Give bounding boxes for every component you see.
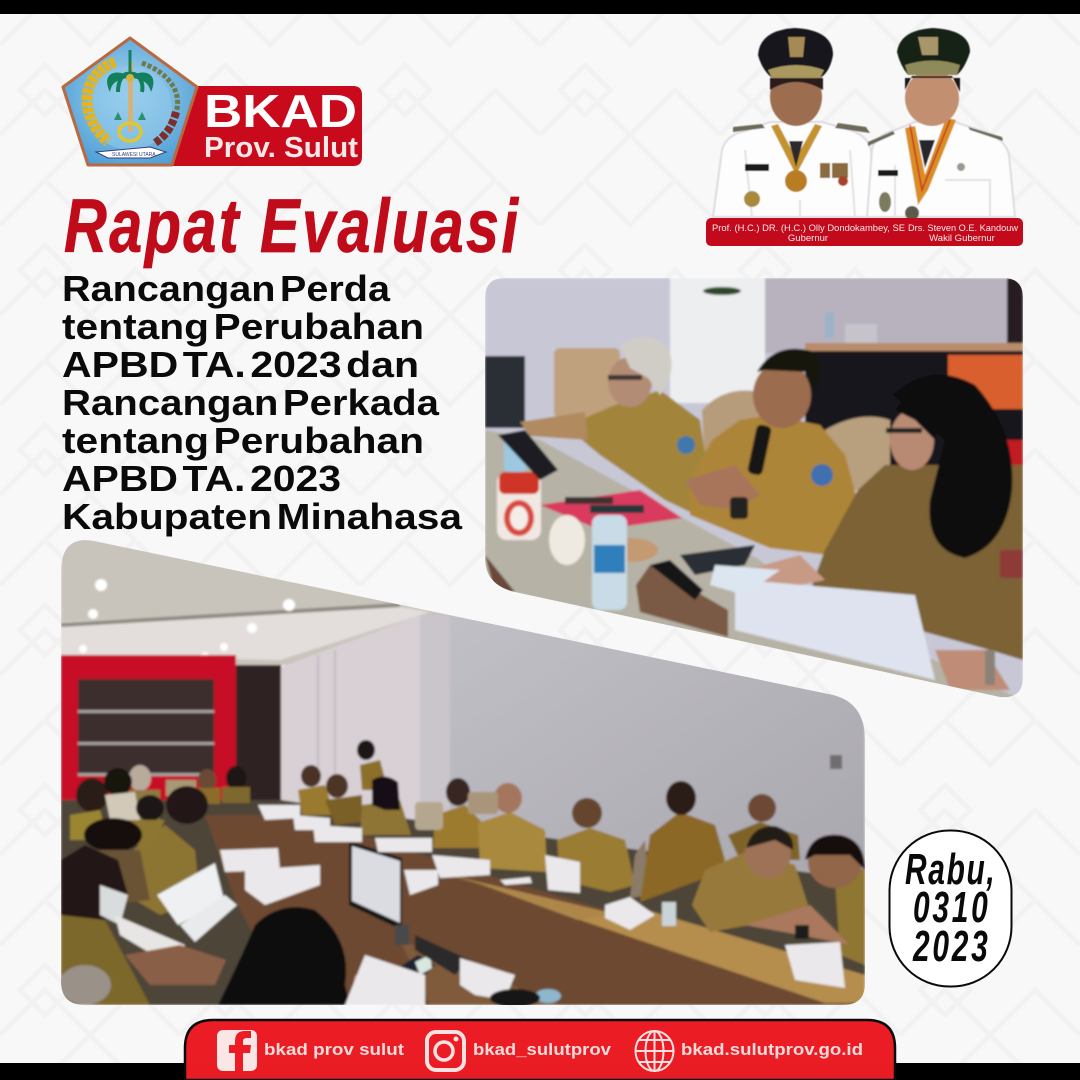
- table items: folder, phones, jar, glass, bottle, bag: [497, 430, 935, 680]
- footer bar: [185, 1020, 895, 1080]
- subtitle text block: Kabupaten Minahasa: [62, 496, 463, 537]
- icon: facebook: [217, 1030, 257, 1071]
- icon: instagram: [427, 1032, 464, 1070]
- near side attendees on the left: [59, 768, 226, 1005]
- man with grey hair: [520, 337, 712, 512]
- name plate: [706, 218, 1023, 246]
- ceiling: [61, 540, 450, 667]
- plate subheading: Prov. Sulut: [204, 132, 358, 164]
- floor and shaded seating area: [61, 800, 865, 1005]
- name plate: Wakil Gubernur: [929, 233, 995, 244]
- subtitle text block: APBD TA. 2023 dan: [62, 344, 419, 385]
- date oval: 0310: [913, 882, 988, 931]
- row of attendees on the far side: [298, 740, 800, 902]
- vice governor portrait: [867, 28, 1015, 220]
- subtitle text block: Rancangan Perkada: [62, 382, 440, 423]
- pentagon emblem: [63, 38, 197, 165]
- subtitle text block: tentang Perubahan: [62, 420, 424, 461]
- date oval: Rabu,: [905, 844, 995, 893]
- clove branch: [142, 63, 178, 112]
- empty chairs: [485, 346, 892, 492]
- date oval: 2023: [912, 921, 988, 970]
- title: Rapat Evaluasi: [64, 184, 520, 269]
- side walls: [281, 610, 865, 880]
- palm tree: [107, 50, 153, 132]
- instagram handle: bkad_sulutprov: [473, 1040, 612, 1059]
- cup: [535, 989, 561, 1003]
- subtitle text block: APBD TA. 2023: [62, 458, 341, 499]
- subtitle text block: [62, 268, 463, 537]
- bottom black band: [0, 1063, 1080, 1080]
- name plate: Gubernur: [788, 233, 828, 244]
- plate heading BKAD: BKAD: [204, 85, 357, 137]
- far end attendees: [120, 765, 250, 820]
- name plate: Prof. (H.C.) DR. (H.C.) Olly Dondokambey, SE: [712, 223, 905, 234]
- woman in front with black hair: [218, 907, 435, 1005]
- website: bkad.sulutprov.go.id: [681, 1040, 863, 1059]
- subtitle text block: Rancangan Perda: [62, 268, 391, 309]
- ribbon: [96, 147, 166, 158]
- papers on the table: [157, 863, 237, 942]
- top black band: [0, 0, 1080, 14]
- cabinet: [805, 343, 1023, 475]
- governor portrait: [713, 28, 878, 217]
- table: [485, 430, 1023, 700]
- flower ring: [119, 123, 141, 141]
- man speaking with microphone: [685, 349, 870, 560]
- photo: three officials at the table: [485, 278, 1023, 700]
- woman with glasses: [745, 375, 1023, 690]
- facebook handle: bkad prov sulut: [264, 1040, 404, 1059]
- near side attendees on the right: [692, 826, 865, 965]
- room background: [485, 278, 1023, 698]
- white boxes and projector: [220, 805, 845, 1005]
- logo: BKAD Prov. Sulut: [63, 38, 362, 166]
- monitor: [349, 841, 470, 975]
- red name plate: [172, 86, 362, 166]
- photo: wide meeting room: [59, 535, 865, 1007]
- date oval: [890, 830, 1012, 986]
- pentagon emblem: SULAWESI UTARA: [112, 152, 156, 158]
- icon: globe: [636, 1031, 674, 1071]
- red wall and dark panels: [61, 655, 281, 805]
- officials portraits: [706, 28, 1023, 246]
- subtitle text block: tentang Perubahan: [62, 306, 424, 347]
- name plate: Drs. Steven O.E. Kandouw: [908, 223, 1018, 234]
- conference table: [205, 815, 865, 1005]
- wheat wreath: [87, 62, 115, 142]
